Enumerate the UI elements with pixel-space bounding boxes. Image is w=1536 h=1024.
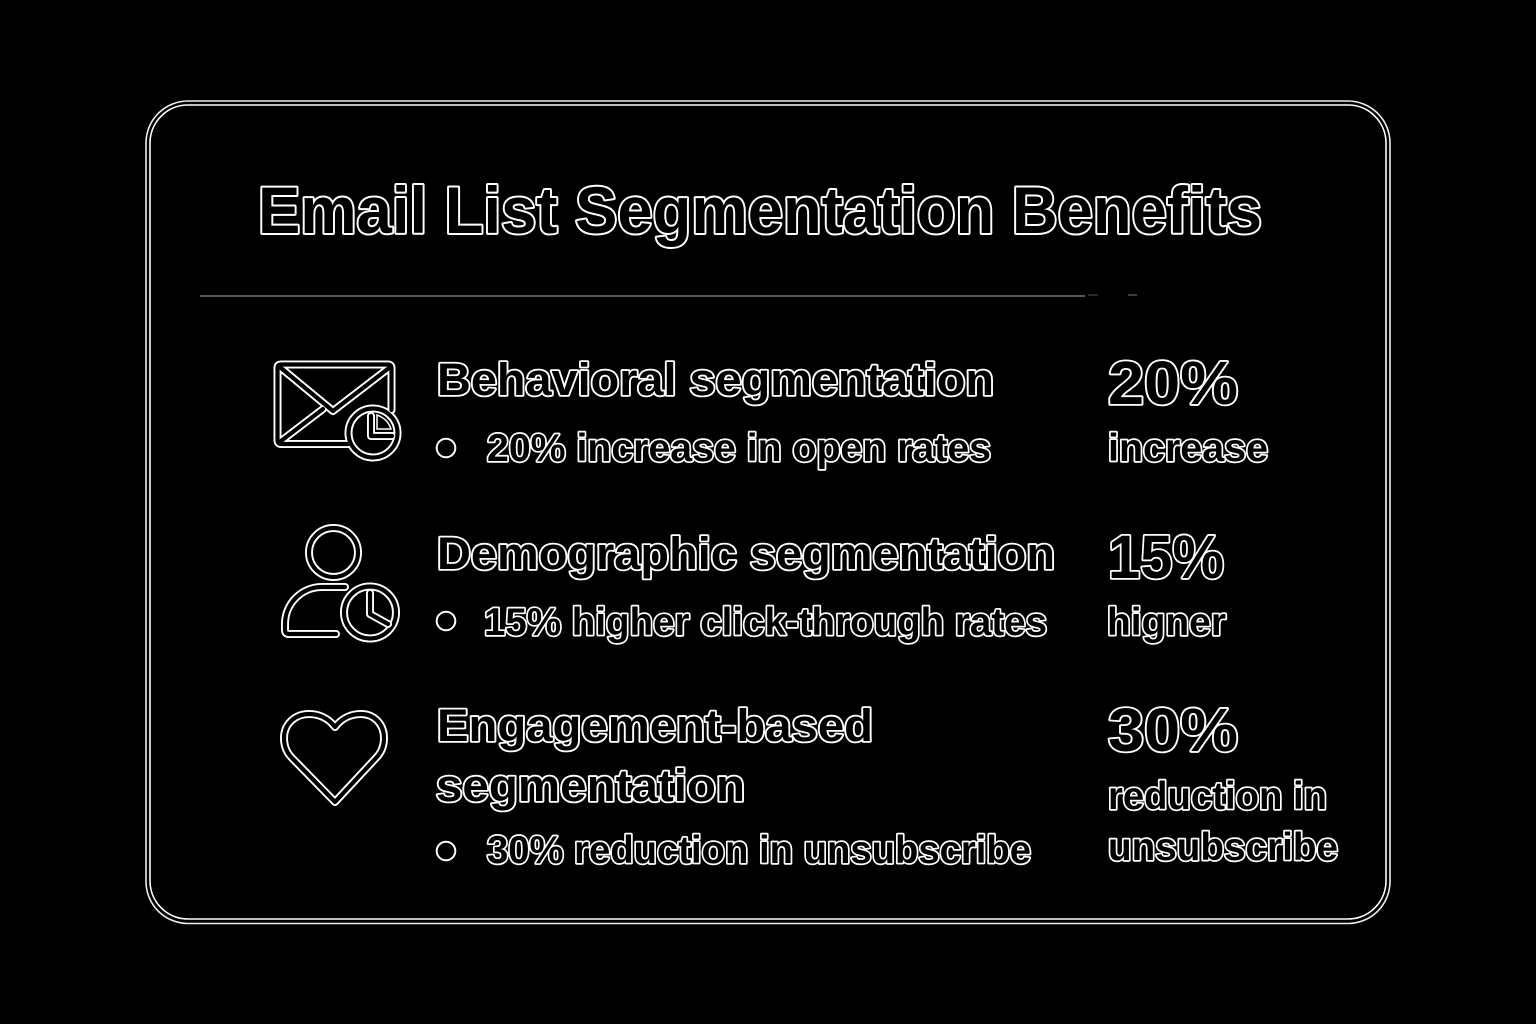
text: click-through benefit: 15% higher click-through rates	[484, 601, 1047, 644]
bullet	[437, 439, 455, 457]
heading: engagement-based segmentation: segmentation	[436, 760, 745, 811]
stat: 30% reduction in unsubscribe: unsubscribe	[1108, 826, 1338, 869]
stat: 20% increase	[1108, 349, 1268, 470]
heading: engagement-based segmentation: Engagement-based	[437, 700, 873, 751]
heading: demographic segmentation: Demographic segmentation	[437, 528, 1055, 579]
bullet	[437, 842, 455, 860]
stat: 30% reduction in unsubscribe: reduction in	[1108, 775, 1327, 818]
row: engagement-based segmentation	[284, 696, 1338, 872]
stat: 20% increase: increase	[1108, 427, 1268, 470]
panel: card with double outline	[146, 101, 1390, 924]
icon: heart	[284, 714, 384, 802]
stat: 20% increase: 20%	[1108, 349, 1238, 417]
title: Email List Segmentation Benefits	[258, 173, 1262, 247]
icon: envelope with pie chart	[278, 364, 398, 458]
heading: behavioral segmentation: Behavioral segmentation	[437, 354, 994, 405]
row: behavioral segmentation	[278, 349, 1268, 470]
stat: 15% higher: 15%	[1108, 523, 1224, 591]
heading: engagement-based segmentation	[436, 700, 873, 811]
text: open rates benefit: 20% increase in open rates	[487, 427, 991, 470]
text: unsubscribe benefit: 30% reduction in unsubscribe	[487, 829, 1031, 872]
stat: 15% higher: higner	[1107, 601, 1226, 644]
icon: person with pie chart	[285, 528, 396, 638]
stat: 15% higher	[1107, 523, 1226, 644]
stat: 30% reduction in unsubscribe	[1108, 696, 1338, 869]
row: demographic segmentation	[285, 523, 1226, 644]
stat: 30% reduction in unsubscribe: 30%	[1108, 696, 1238, 764]
bullet	[437, 612, 455, 630]
